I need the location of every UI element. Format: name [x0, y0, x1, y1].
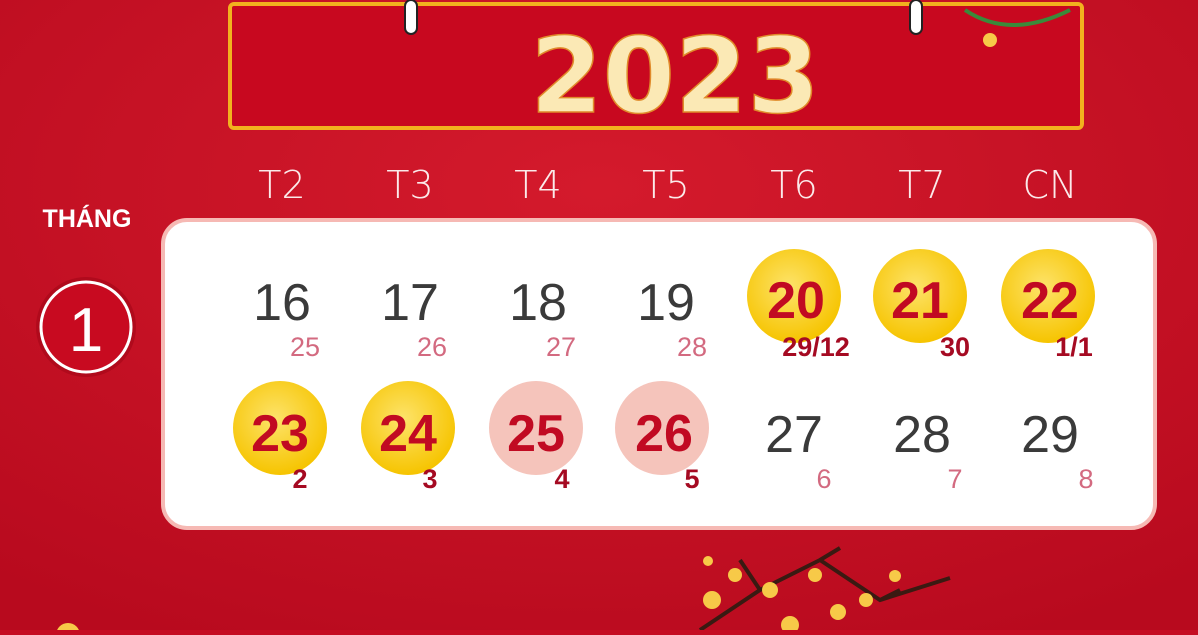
- weekday headers: T7: [898, 163, 946, 207]
- row 1 dates: 21: [891, 272, 949, 330]
- title: 2023: 2023: [530, 15, 820, 137]
- label: THÁNG: THÁNG: [43, 204, 131, 233]
- calendar panel: 1/1: [1055, 332, 1093, 362]
- calendar panel: 8: [1078, 464, 1094, 494]
- calendar panel: 27: [546, 332, 576, 362]
- calendar panel: [163, 220, 1155, 528]
- calendar panel: 28: [677, 332, 707, 362]
- row 1 dates: 16: [253, 274, 311, 332]
- weekday headers: CN: [1023, 163, 1077, 207]
- calendar panel: 7: [947, 464, 963, 494]
- calendar panel: 6: [816, 464, 832, 494]
- row 1 dates: 18: [509, 274, 567, 332]
- calendar panel: 25: [290, 332, 320, 362]
- calendar panel: 5: [684, 464, 700, 494]
- decoration: yellow dot bottom left: [56, 623, 80, 635]
- row 2 dates: [251, 405, 1079, 464]
- row 2 dates: 26: [635, 405, 693, 463]
- header: year banner: [230, 0, 1082, 137]
- month badge: 1: [36, 277, 136, 377]
- weekday headers: T5: [642, 163, 690, 207]
- row 1 dates: 20: [767, 272, 825, 330]
- row 2 dates: 24: [379, 405, 437, 463]
- row 1 dates: [253, 272, 1079, 332]
- decoration: apricot blossom branch: [700, 548, 950, 634]
- calendar panel: 30: [940, 332, 970, 362]
- row 1 dates: 19: [637, 274, 695, 332]
- calendar panel: 3: [422, 464, 438, 494]
- row 2 dates: 27: [765, 406, 823, 464]
- row 1 dates: 17: [381, 274, 439, 332]
- calendar panel: 4: [554, 464, 570, 494]
- weekday headers: T6: [770, 163, 818, 207]
- calendar panel: 26: [417, 332, 447, 362]
- month badge: 1: 1: [69, 296, 103, 365]
- row 2 dates: 28: [893, 406, 951, 464]
- row 2 dates: 23: [251, 405, 309, 463]
- weekday headers: T2: [258, 163, 306, 207]
- weekday headers: T3: [386, 163, 434, 207]
- weekday headers: [258, 163, 1077, 207]
- decoration: blossom top right: [965, 10, 1070, 47]
- row 1 dates: 22: [1021, 272, 1079, 330]
- calendar panel: 2: [292, 464, 308, 494]
- row 2 dates: 29: [1021, 406, 1079, 464]
- weekday headers: T4: [514, 163, 562, 207]
- calendar panel: 29/12: [782, 332, 850, 362]
- row 2 dates: 25: [507, 405, 565, 463]
